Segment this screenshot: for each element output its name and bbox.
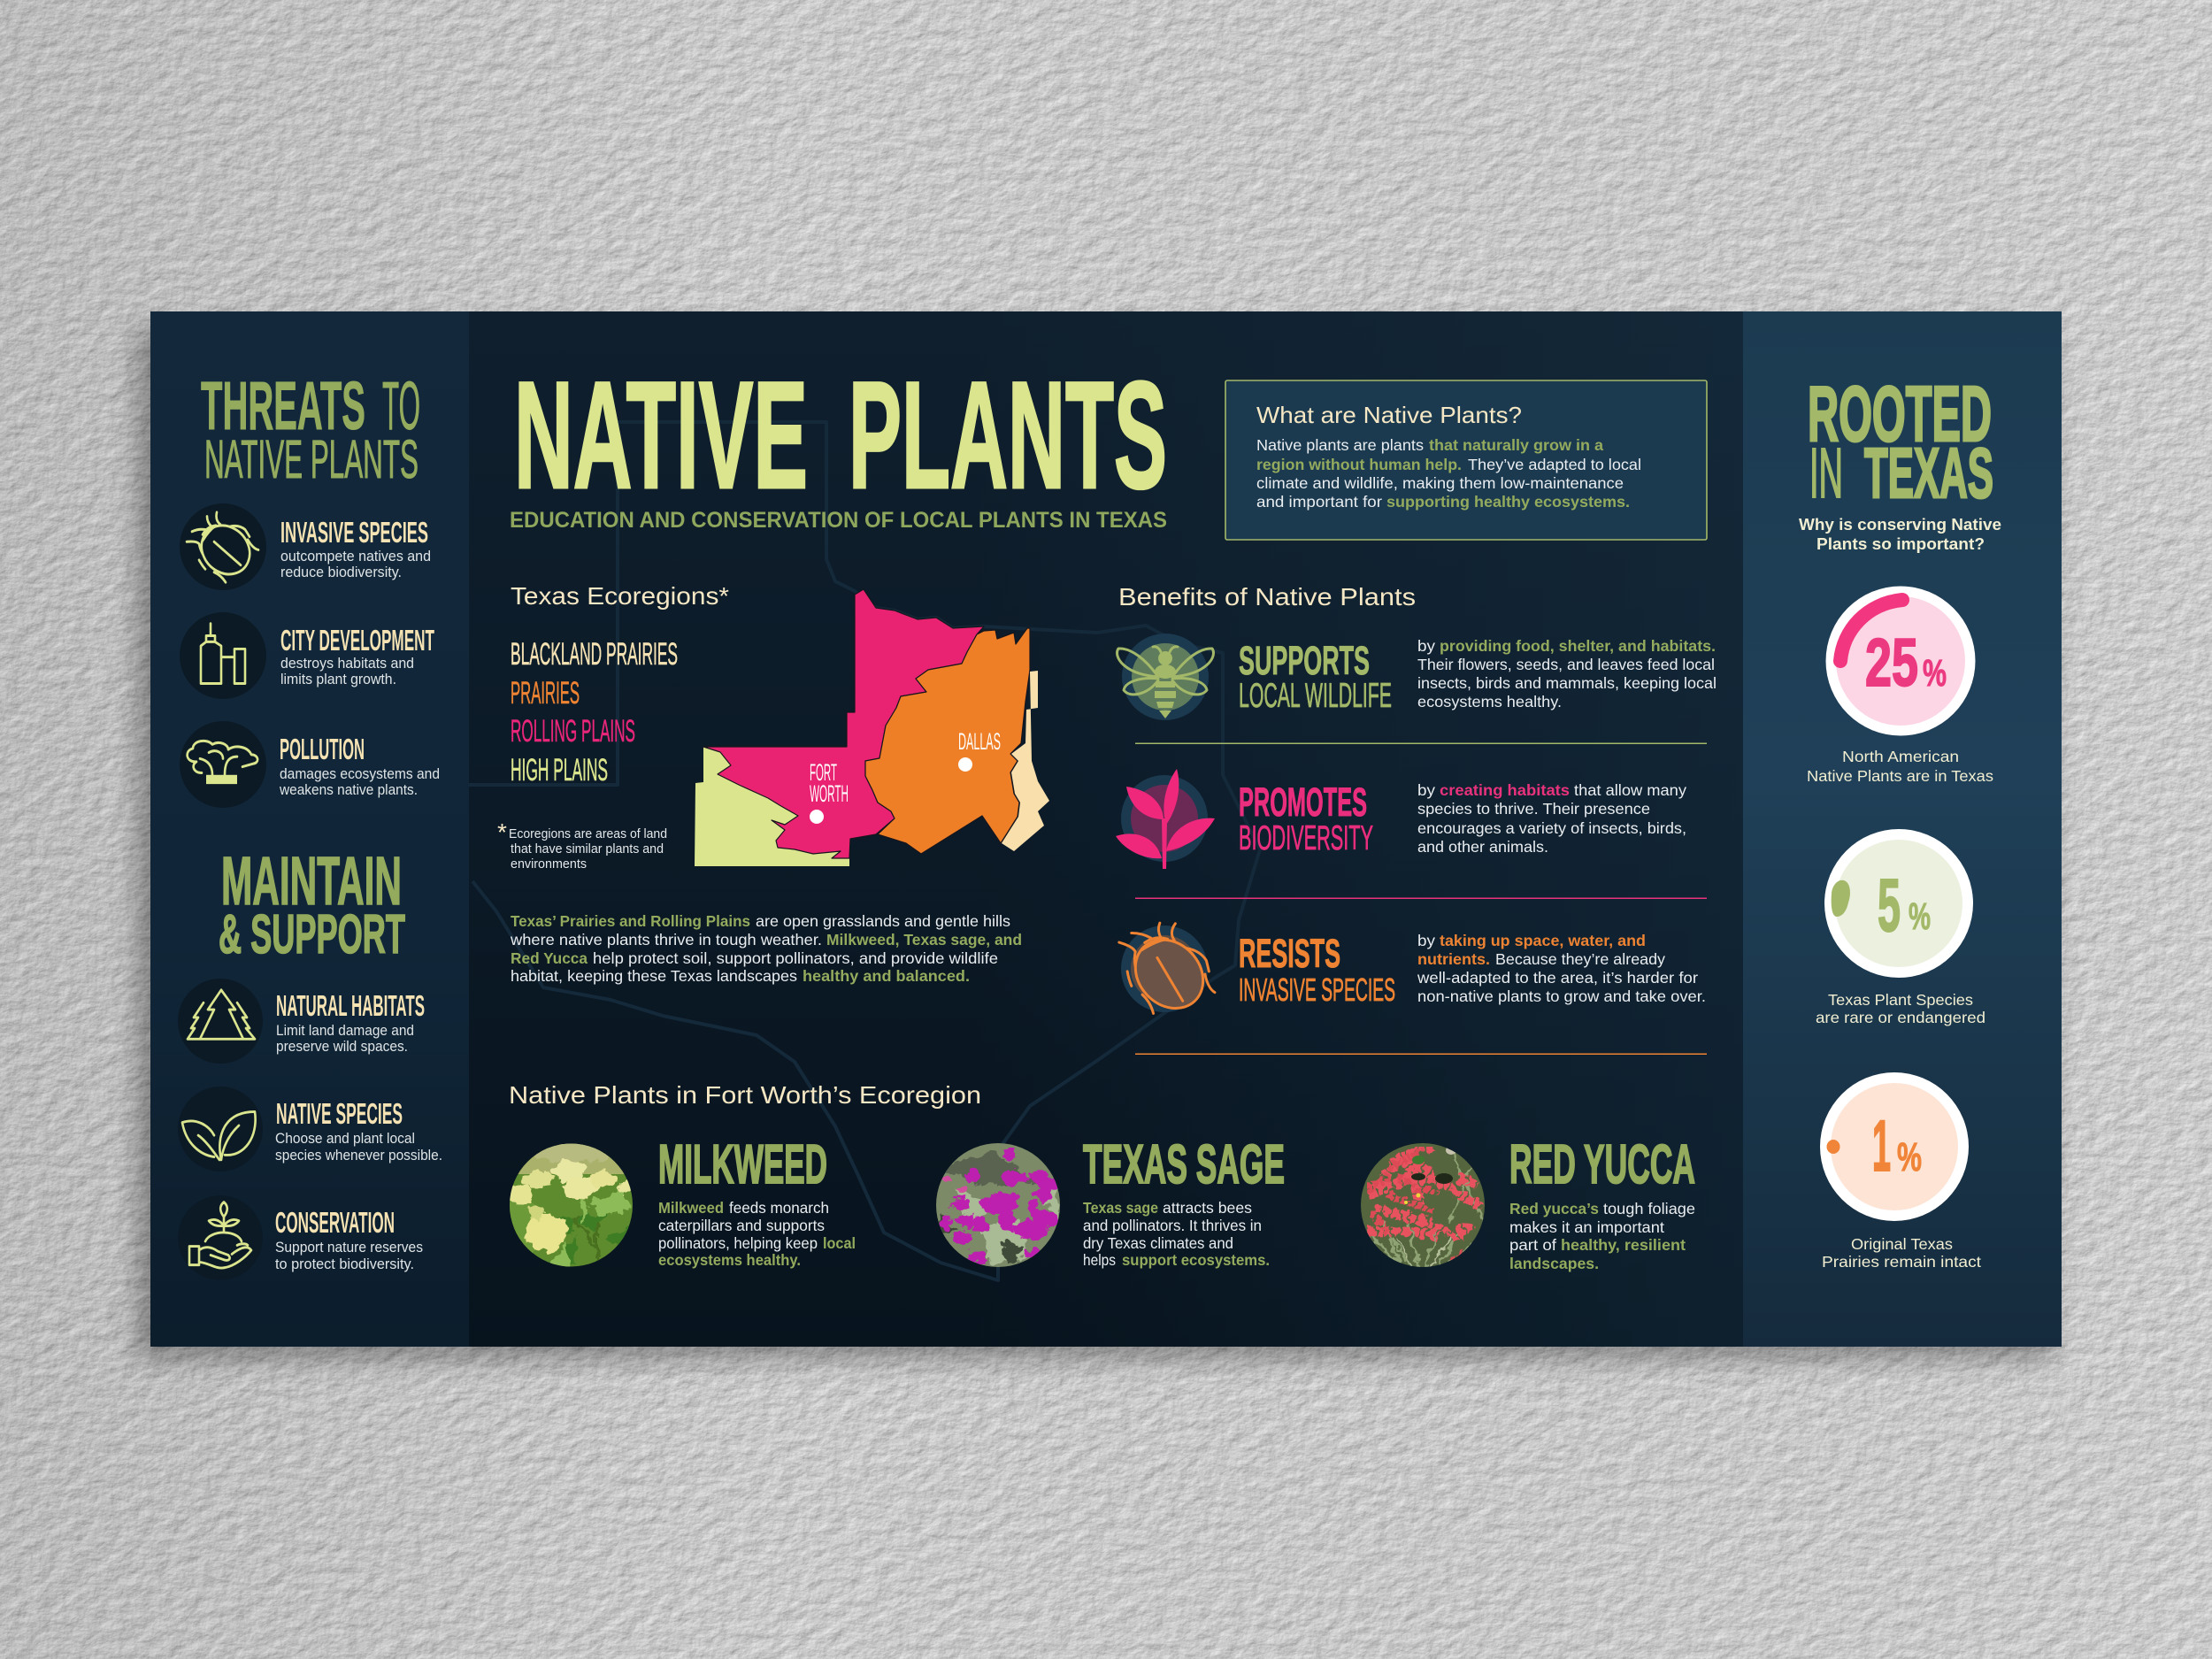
panel: threats and maintain sidebar bbox=[150, 311, 469, 1347]
heading: threats to native plants bbox=[201, 368, 420, 489]
icon: pollution cloud bbox=[188, 741, 257, 784]
stat: 1 percent: Prairies remain intact bbox=[1822, 1253, 1981, 1271]
panel: Texas ecoregions bbox=[497, 582, 1049, 985]
plant card: milkweed bbox=[510, 1143, 855, 1269]
plant card: red yucca: makes it an important bbox=[1509, 1218, 1664, 1236]
main title: NATIVE bbox=[514, 350, 808, 520]
panel: center background bbox=[469, 311, 1743, 1347]
benefit: resists invasive species: RESISTS bbox=[1239, 931, 1340, 976]
map: Texas ecoregions around Fort Worth and Dallas: WORTH bbox=[810, 780, 849, 807]
panel: rooted in Texas sidebar bbox=[1743, 311, 2062, 1347]
action: conservation: to protect biodiversity. bbox=[275, 1256, 414, 1272]
benefit: promotes biodiversity: and other animals. bbox=[1417, 838, 1548, 856]
threat: pollution: damages ecosystems and bbox=[280, 765, 440, 782]
legend: ecoregions: ROLLING PLAINS bbox=[511, 714, 635, 749]
benefit: resists invasive species: taking up space, water, and bbox=[1440, 932, 1646, 949]
callout: what are native plants: Native plants are plants bbox=[1256, 436, 1424, 454]
icon: leaves bbox=[182, 1111, 256, 1160]
benefit: promotes biodiversity: encourages a variety of insects, birds, bbox=[1417, 819, 1686, 837]
icon: beetle bbox=[187, 512, 258, 583]
benefit: resists invasive species: nutrients. bbox=[1417, 950, 1490, 968]
plant card: red yucca: RED YUCCA bbox=[1509, 1134, 1695, 1195]
callout: what are native plants: They’ve adapted to local bbox=[1468, 456, 1641, 473]
heading: rooted in Texas: TEXAS bbox=[1864, 434, 1993, 512]
text: why conserving matters bbox=[1799, 516, 2001, 553]
heading: Texas Ecoregions: Texas Ecoregions* bbox=[511, 582, 729, 610]
action: natural habitats bbox=[178, 979, 425, 1064]
icon: bee bbox=[1118, 634, 1213, 720]
plant card: Texas sage: attracts bees bbox=[1163, 1199, 1252, 1217]
benefit: resists invasive species: Because they’re already bbox=[1495, 950, 1665, 968]
label: Fort Worth bbox=[810, 759, 849, 824]
map: Texas ecoregions around Fort Worth and Dallas: DALLAS bbox=[958, 728, 1001, 755]
threat: city development bbox=[180, 612, 434, 699]
benefit: supports local wildlife: ecosystems healthy. bbox=[1417, 693, 1562, 710]
action: conservation bbox=[178, 1195, 423, 1280]
label: Dallas bbox=[958, 728, 1001, 772]
heading: native plants in Fort Worth: Native Plants in Fort Worth’s Ecoregion bbox=[509, 1081, 981, 1109]
action: native species bbox=[178, 1087, 442, 1171]
plant card: milkweed: MILKWEED bbox=[658, 1134, 827, 1195]
callout: what are native plants: and important for bbox=[1256, 493, 1382, 511]
action: native species: species whenever possible. bbox=[275, 1147, 442, 1164]
benefit: promotes biodiversity: that allow many bbox=[1574, 781, 1686, 799]
threat: pollution: weakens native plants. bbox=[279, 781, 418, 798]
callout: what are native plants: region without human help. bbox=[1256, 456, 1462, 473]
callout: what are native plants: What are Native Plants? bbox=[1256, 402, 1522, 428]
action: natural habitats: Limit land damage and bbox=[276, 1022, 414, 1039]
action: native species: Choose and plant local bbox=[275, 1130, 415, 1147]
threat: city development: CITY DEVELOPMENT bbox=[280, 624, 434, 657]
footnote: environments bbox=[511, 856, 587, 872]
plant card: milkweed: Milkweed bbox=[658, 1199, 724, 1217]
icon: pine trees bbox=[188, 990, 255, 1039]
panel: native plants in Fort Worth's ecoregion bbox=[500, 1081, 1695, 1274]
callout: what are native plants: that naturally grow in a bbox=[1429, 436, 1603, 454]
heading: rooted in Texas: ROOTED bbox=[1808, 370, 1992, 457]
benefit: resists invasive species: INVASIVE SPECIES bbox=[1239, 972, 1395, 1008]
text: why conserving matters: Plants so important? bbox=[1816, 535, 1985, 553]
plant card: Texas sage: TEXAS SAGE bbox=[1083, 1134, 1285, 1195]
benefit: promotes biodiversity: PROMOTES bbox=[1239, 780, 1367, 825]
plant card: Texas sage: support ecosystems. bbox=[1122, 1251, 1270, 1269]
map: Texas ecoregions around Fort Worth and Dallas bbox=[695, 589, 1049, 866]
stat: 1 percent: Original Texas bbox=[1851, 1235, 1953, 1253]
panel: threats and maintain sidebar: TO bbox=[382, 368, 420, 444]
heading: threats to native plants: THREATS bbox=[201, 368, 365, 444]
threat: invasive species: reduce biodiversity. bbox=[280, 564, 402, 580]
photo: milkweed bbox=[510, 1143, 633, 1267]
stat: 1 percent: 1 bbox=[1872, 1106, 1891, 1187]
plant card: red yucca: Red yucca’s bbox=[1509, 1200, 1599, 1217]
photo: red yucca bbox=[1361, 1143, 1485, 1267]
text block: ecoregion summary: healthy and balanced. bbox=[803, 967, 970, 985]
footnote: * bbox=[497, 818, 507, 846]
stat: 5 percent: Texas Plant Species bbox=[1828, 991, 1973, 1009]
plant card: red yucca: landscapes. bbox=[1509, 1255, 1599, 1272]
benefit: resists invasive species: non-native plants to grow and take over. bbox=[1417, 987, 1706, 1005]
threat: invasive species: outcompete natives and bbox=[280, 548, 431, 565]
benefit: resists invasive species bbox=[1099, 907, 1706, 1033]
text block: ecoregion summary: Texas’ Prairies and Rolling Plains bbox=[511, 912, 750, 930]
stat: 1 percent: % bbox=[1897, 1134, 1922, 1179]
action: conservation: CONSERVATION bbox=[275, 1206, 395, 1239]
callout: what are native plants: supporting healthy ecosystems. bbox=[1386, 493, 1630, 511]
plant card: Texas sage: and pollinators. It thrives in bbox=[1083, 1217, 1262, 1234]
text block: ecoregion summary bbox=[510, 912, 1022, 985]
stat: 1 percent bbox=[1820, 1072, 1981, 1271]
photo: Texas sage bbox=[933, 1140, 1063, 1271]
stat: 25 percent: % bbox=[1923, 652, 1947, 695]
benefit: supports local wildlife: LOCAL WILDLIFE bbox=[1239, 677, 1392, 715]
benefit: supports local wildlife: providing food, shelter, and habitats. bbox=[1440, 637, 1716, 655]
plant card: Texas sage bbox=[933, 1134, 1285, 1271]
benefit: promotes biodiversity bbox=[1116, 769, 1686, 869]
stat: 25 percent bbox=[1807, 586, 1993, 785]
footnote: that have similar plants and bbox=[511, 841, 664, 856]
threat: invasive species: INVASIVE SPECIES bbox=[280, 516, 428, 549]
text block: ecoregion summary: help protect soil, support pollinators, and provide wildlife bbox=[593, 949, 998, 967]
stat: 5 percent bbox=[1816, 829, 1985, 1026]
action: natural habitats: preserve wild spaces. bbox=[276, 1038, 408, 1055]
panel: benefits of native plants bbox=[1099, 583, 1717, 1055]
icon: pink plant bbox=[1116, 769, 1215, 869]
threat: pollution: POLLUTION bbox=[280, 733, 365, 765]
text block: ecoregion summary: are open grasslands and gentle hills bbox=[756, 912, 1010, 930]
benefit: supports local wildlife: by bbox=[1417, 637, 1435, 655]
plant card: red yucca bbox=[1358, 1134, 1695, 1274]
heading: rooted in Texas: IN bbox=[1809, 434, 1843, 512]
threat: invasive species bbox=[180, 503, 431, 590]
plant card: red yucca: part of bbox=[1509, 1236, 1556, 1254]
panel: Texas ecoregions: BLACKLAND PRAIRIES bbox=[511, 637, 678, 672]
stat: 25 percent: Native Plants are in Texas bbox=[1807, 767, 1993, 785]
icon: hand with sprout bbox=[189, 1202, 251, 1268]
benefit: promotes biodiversity: creating habitats bbox=[1440, 781, 1570, 799]
text block: ecoregion summary: Milkweed, Texas sage, and bbox=[826, 931, 1022, 949]
benefit: promotes biodiversity: species to thrive. Their presence bbox=[1417, 800, 1650, 818]
text block: ecoregion summary: Red Yucca bbox=[511, 949, 588, 967]
benefit: supports local wildlife: insects, birds and mammals, keeping local bbox=[1417, 674, 1717, 692]
plant card: Texas sage: dry Texas climates and bbox=[1083, 1234, 1233, 1252]
legend: ecoregions: PRAIRIES bbox=[511, 676, 580, 710]
infographic board bbox=[150, 311, 2062, 1347]
text: why conserving matters: Why is conserving Native bbox=[1799, 516, 2001, 534]
plant card: Texas sage: helps bbox=[1083, 1251, 1116, 1269]
plant card: milkweed: pollinators, helping keep bbox=[658, 1234, 818, 1252]
label: Fort Worth: FORT bbox=[810, 759, 837, 786]
heading: maintain and support: MAINTAIN bbox=[221, 843, 402, 919]
footnote: Ecoregions are areas of land bbox=[509, 826, 667, 841]
footnote bbox=[497, 818, 667, 872]
threat: city development: destroys habitats and bbox=[280, 655, 414, 672]
plant card: red yucca: healthy, resilient bbox=[1561, 1236, 1686, 1254]
plant card: milkweed: local bbox=[823, 1234, 856, 1252]
benefit: supports local wildlife: SUPPORTS bbox=[1239, 638, 1370, 683]
callout: what are native plants: climate and wildlife, making them low-maintenance bbox=[1256, 474, 1624, 492]
benefit: supports local wildlife bbox=[1118, 634, 1717, 720]
stat: 5 percent: % bbox=[1909, 895, 1931, 938]
heading: maintain and support bbox=[219, 843, 405, 965]
action: native species: NATIVE SPECIES bbox=[276, 1097, 403, 1130]
heading: benefits: Benefits of Native Plants bbox=[1118, 583, 1416, 611]
heading: maintain and support: & SUPPORT bbox=[219, 904, 405, 965]
plant card: red yucca: tough foliage bbox=[1603, 1200, 1695, 1217]
callout: what are native plants bbox=[1225, 380, 1707, 540]
text block: ecoregion summary: where native plants thrive in tough weather. bbox=[510, 931, 822, 949]
benefit: resists invasive species: well-adapted to the area, it’s harder for bbox=[1417, 969, 1698, 987]
threat: pollution bbox=[180, 721, 440, 808]
stat: 5 percent: are rare or endangered bbox=[1816, 1009, 1985, 1026]
plant card: milkweed: caterpillars and supports bbox=[658, 1217, 825, 1234]
plant card: milkweed: ecosystems healthy. bbox=[658, 1251, 801, 1269]
stat: 25 percent: North American bbox=[1842, 748, 1959, 765]
icon: orange beetle bbox=[1099, 907, 1233, 1033]
icon: city buildings bbox=[201, 624, 245, 683]
subtitle: EDUCATION AND CONSERVATION OF LOCAL PLANTS IN TEXAS bbox=[510, 508, 1167, 533]
legend: ecoregions: HIGH PLAINS bbox=[511, 753, 608, 787]
plant card: milkweed: feeds monarch bbox=[729, 1199, 829, 1217]
action: conservation: Support nature reserves bbox=[275, 1239, 423, 1256]
benefit: promotes biodiversity: BIODIVERSITY bbox=[1239, 819, 1373, 857]
benefit: promotes biodiversity: by bbox=[1417, 781, 1435, 799]
stat: 25 percent: 25 bbox=[1865, 626, 1918, 701]
plant card: Texas sage: Texas sage bbox=[1083, 1199, 1158, 1217]
heading: threats to native plants: NATIVE PLANTS bbox=[204, 429, 419, 489]
stat: 5 percent: 5 bbox=[1878, 864, 1901, 947]
legend: ecoregions bbox=[511, 637, 678, 787]
benefit: supports local wildlife: Their flowers, seeds, and leaves feed local bbox=[1417, 656, 1715, 673]
action: natural habitats: NATURAL HABITATS bbox=[276, 989, 425, 1022]
threat: city development: limits plant growth. bbox=[280, 671, 396, 687]
text block: ecoregion summary: habitat, keeping these Texas landscapes bbox=[511, 967, 797, 985]
heading: rooted in Texas bbox=[1808, 370, 1993, 512]
benefit: resists invasive species: by bbox=[1417, 932, 1435, 949]
main title: PLANTS bbox=[849, 350, 1167, 520]
